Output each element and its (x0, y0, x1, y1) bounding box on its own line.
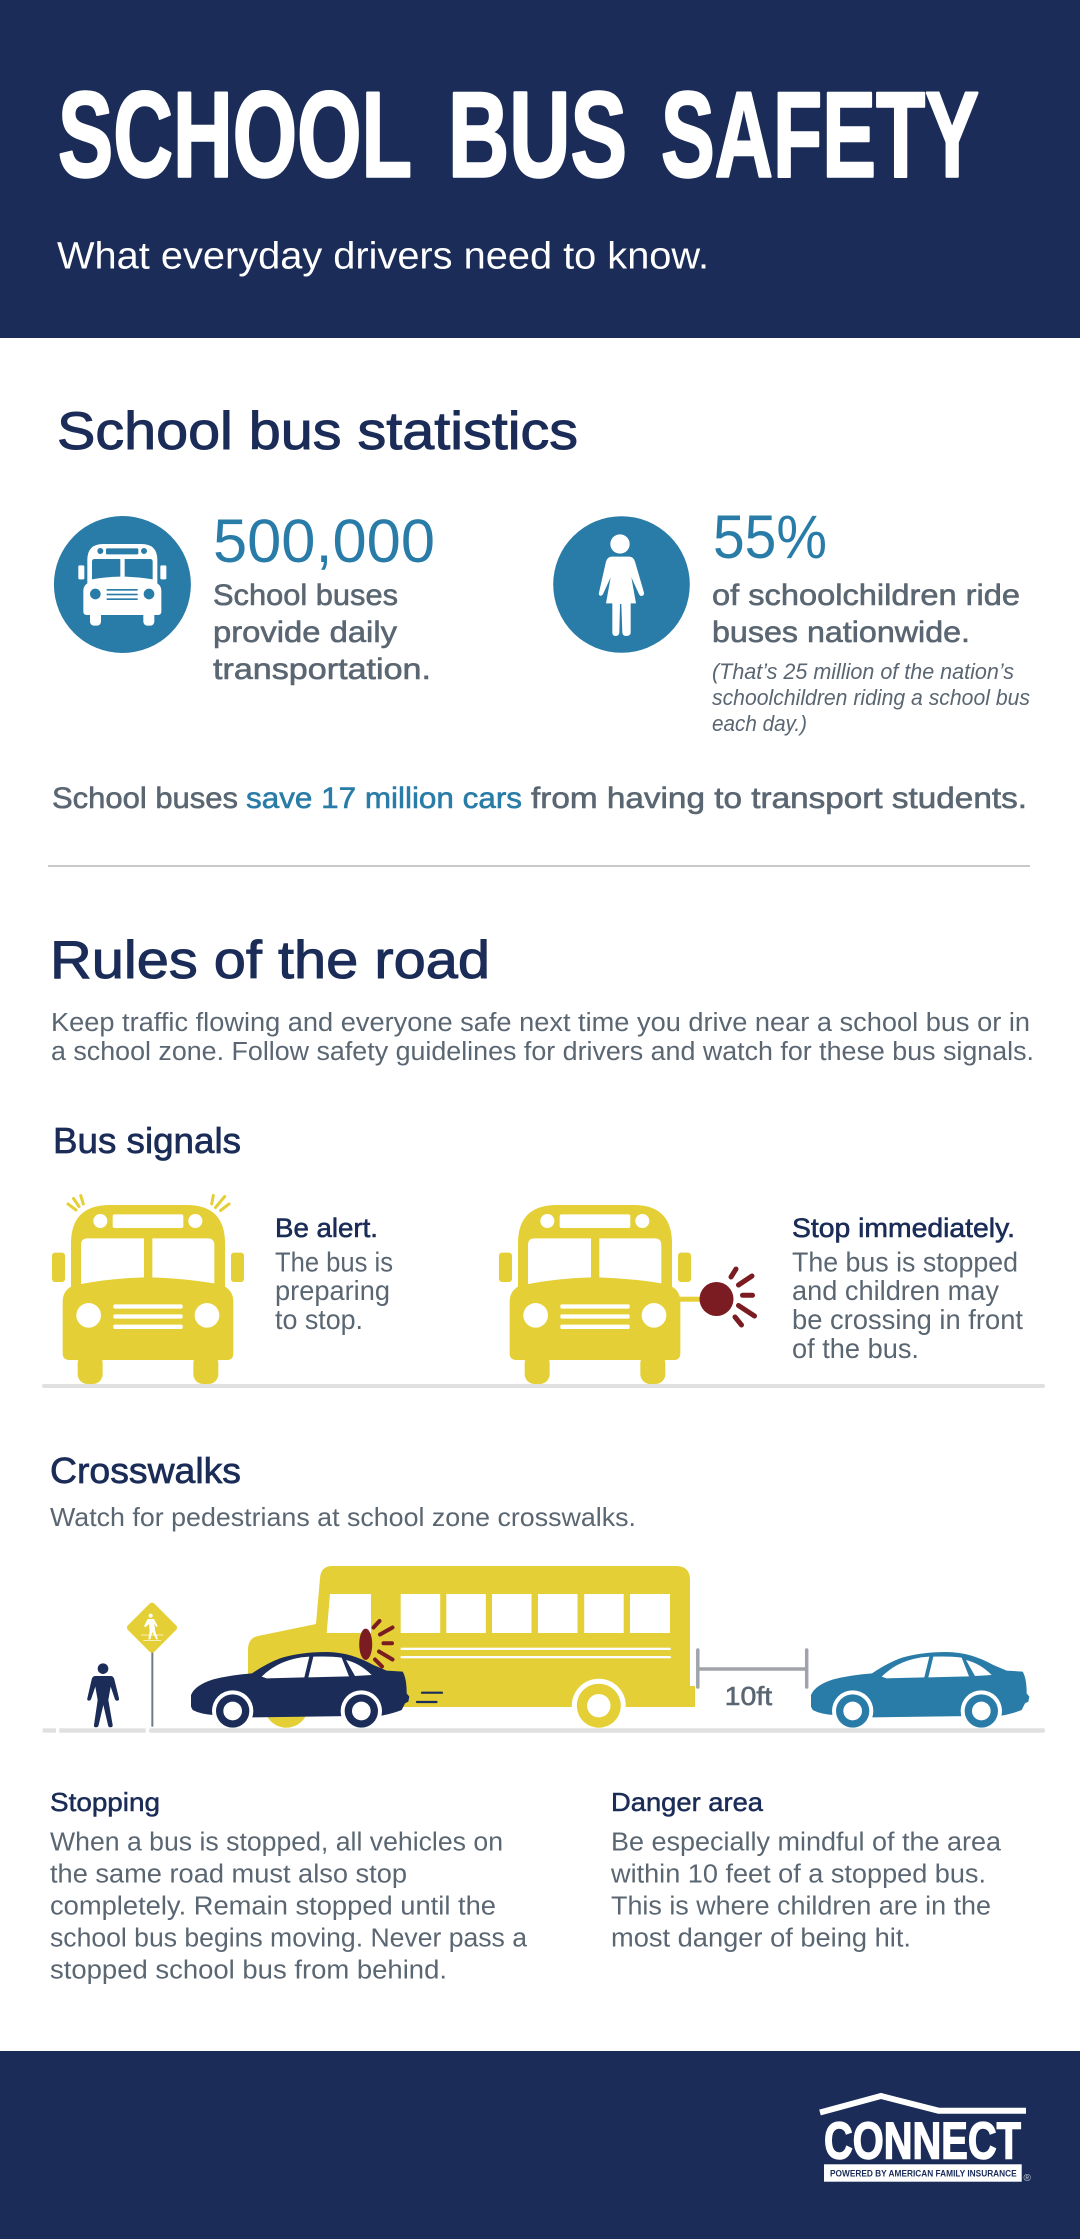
text: stopping: completely. Remain stopped until the (50, 1892, 496, 1920)
stat: 500,000 school buses: transportation. (213, 653, 431, 686)
stat: 500,000 school buses (213, 507, 435, 686)
stat: 55% of schoolchildren: buses nationwide. (712, 616, 970, 649)
stat: 500,000 school buses: 500,000 (213, 507, 435, 575)
intro text (51, 1009, 1034, 1066)
heading: school bus statistics: School bus statistics (57, 402, 578, 461)
intro text: a school zone. Follow safety guidelines for drivers and watch for these bus signals. (51, 1038, 1034, 1066)
logo: connect: CONNECT (824, 2112, 1021, 2170)
text: danger area: Be especially mindful of the area (611, 1829, 1002, 1857)
stat: 55% of schoolchildren (712, 503, 1030, 736)
title: BUS (448, 66, 627, 202)
icon: blue car (811, 1652, 1029, 1732)
text: be alert: to stop. (275, 1304, 363, 1335)
logo: connect (820, 2096, 1032, 2184)
subtitle: What everyday drivers need to know. (57, 236, 709, 278)
text: stop immediately: and children may (792, 1275, 999, 1306)
heading: bus signals: Bus signals (53, 1120, 241, 1161)
title: SCHOOL (58, 66, 412, 202)
text: be alert: preparing (275, 1275, 390, 1306)
icon: school bus side view (248, 1566, 695, 1733)
stat: 55% of schoolchildren: 55% (713, 503, 827, 571)
text: stopping: stopped school bus from behind. (50, 1956, 447, 1984)
panel: school bus statistics (52, 402, 1030, 815)
text: stop immediately: The bus is stopped (792, 1247, 1018, 1278)
stat: 55% of schoolchildren: (That’s 25 million of the nation’s (712, 659, 1014, 684)
stat: 500,000 school buses: provide daily (213, 616, 397, 649)
text: stop immediately: be crossing in front (792, 1304, 1023, 1335)
title (58, 66, 979, 202)
text: stopping (50, 1787, 528, 1984)
text: stopping: the same road must also stop (50, 1861, 407, 1889)
text: be alert: The bus is (275, 1247, 393, 1278)
text: danger area: most danger of being hit. (611, 1925, 911, 1953)
text: danger area: Danger area (611, 1787, 764, 1817)
text: crosswalk note: Watch for pedestrians at school zone crosswalks. (50, 1502, 636, 1532)
text: stopping: Stopping (50, 1787, 160, 1817)
icon: bus in circle (54, 516, 191, 653)
panel: rules of the road (42, 931, 1045, 1984)
text: stop immediately: Stop immediately. (792, 1213, 1015, 1243)
icon: flashing red stop light (359, 1621, 392, 1666)
icon: person in circle (553, 516, 690, 653)
text: stop immediately: of the bus. (792, 1333, 919, 1364)
icon: speed lines (417, 1693, 442, 1702)
stat: 55% of schoolchildren: each day.) (712, 711, 807, 736)
text: stopping: When a bus is stopped, all vehicles on (50, 1829, 503, 1857)
intro text: Keep traffic flowing and everyone safe next time you drive near a school bus or in (51, 1009, 1030, 1037)
logo: connect: POWERED BY AMERICAN FAMILY INSURANCE (830, 2169, 1017, 2179)
icon: navy car (191, 1652, 409, 1732)
dimension: 10ft: 10ft (725, 1681, 773, 1711)
icon: pedestrian crossing sign (126, 1601, 178, 1727)
icon: pedestrian (87, 1663, 119, 1727)
heading: crosswalks: Crosswalks (50, 1450, 241, 1491)
header panel (0, 0, 1080, 338)
stat: 55% of schoolchildren: of schoolchildren ride (712, 579, 1020, 612)
text: stop immediately (792, 1213, 1023, 1364)
text: stopping: school bus begins moving. Never pass a (50, 1925, 528, 1953)
callout: 17 million cars: save 17 million cars (246, 782, 522, 815)
text: be alert: Be alert. (275, 1213, 378, 1243)
callout: 17 million cars: from having to transport students. (531, 782, 1027, 815)
heading: rules of the road: Rules of the road (50, 931, 490, 990)
text: danger area: This is where children are in the (611, 1892, 991, 1920)
callout: 17 million cars (52, 782, 1027, 815)
footer panel (0, 2051, 1080, 2239)
logo: connect: ® (1024, 2173, 1032, 2184)
text: be alert (275, 1213, 393, 1335)
text: danger area (610, 1787, 1002, 1953)
text: danger area: within 10 feet of a stopped bus. (610, 1861, 986, 1889)
icon: yellow bus with stop arm (499, 1205, 754, 1384)
callout: 17 million cars: School buses (52, 782, 238, 815)
illustration: crosswalk scene (43, 1566, 1045, 1733)
stat: 500,000 school buses: School buses (213, 579, 398, 612)
stat: 55% of schoolchildren: schoolchildren riding a school bus (712, 685, 1030, 710)
dimension: 10ft (698, 1650, 807, 1711)
icon: yellow bus with alert lights (52, 1196, 244, 1384)
